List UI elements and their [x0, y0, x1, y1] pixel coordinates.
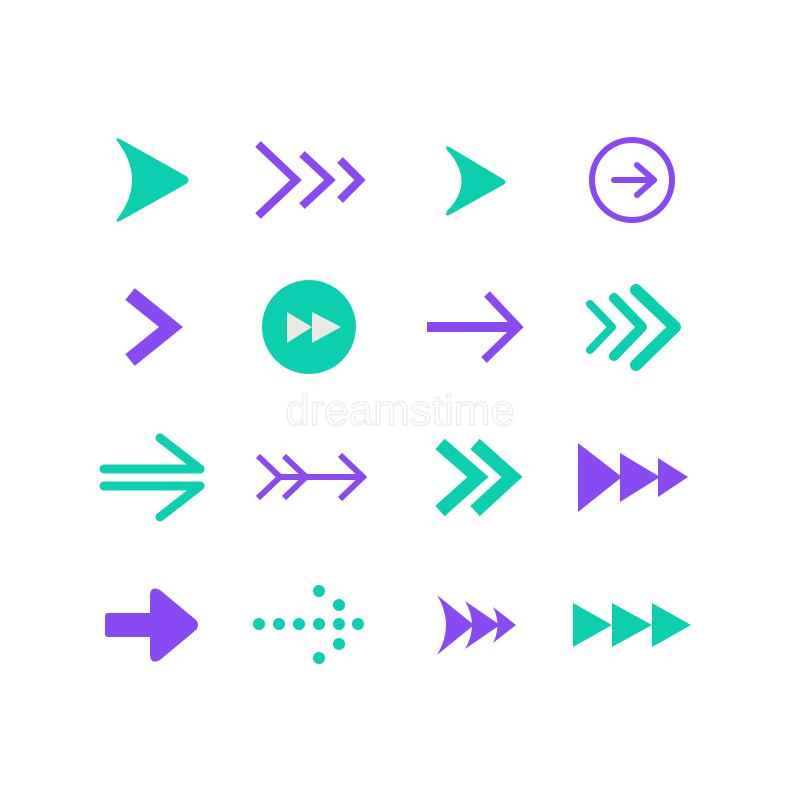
icon: purple curved arrowheads: [437, 595, 516, 655]
icon: teal arrowhead small: [446, 146, 506, 215]
icon: purple triangles: [578, 443, 688, 512]
icon: purple long arrow: [427, 294, 518, 360]
icon: purple fletched arrow: [258, 455, 363, 499]
icon: circled arrow: [592, 140, 672, 220]
icon: teal triple chevron rounded: [590, 290, 675, 365]
icon: teal dotted arrow: [253, 585, 364, 664]
icon: teal arrowhead: [116, 138, 188, 222]
icon: teal triangles: [573, 603, 691, 647]
watermark: dreamstime: [285, 386, 515, 435]
icon: fast-forward circle: [262, 280, 356, 374]
icon: teal double thick chevron: [440, 444, 512, 511]
icon: purple block arrow: [105, 588, 198, 662]
icon: teal double line arrow: [104, 438, 200, 517]
icon: purple triple chevron: [258, 144, 360, 216]
icon: purple bold chevron: [130, 294, 171, 360]
